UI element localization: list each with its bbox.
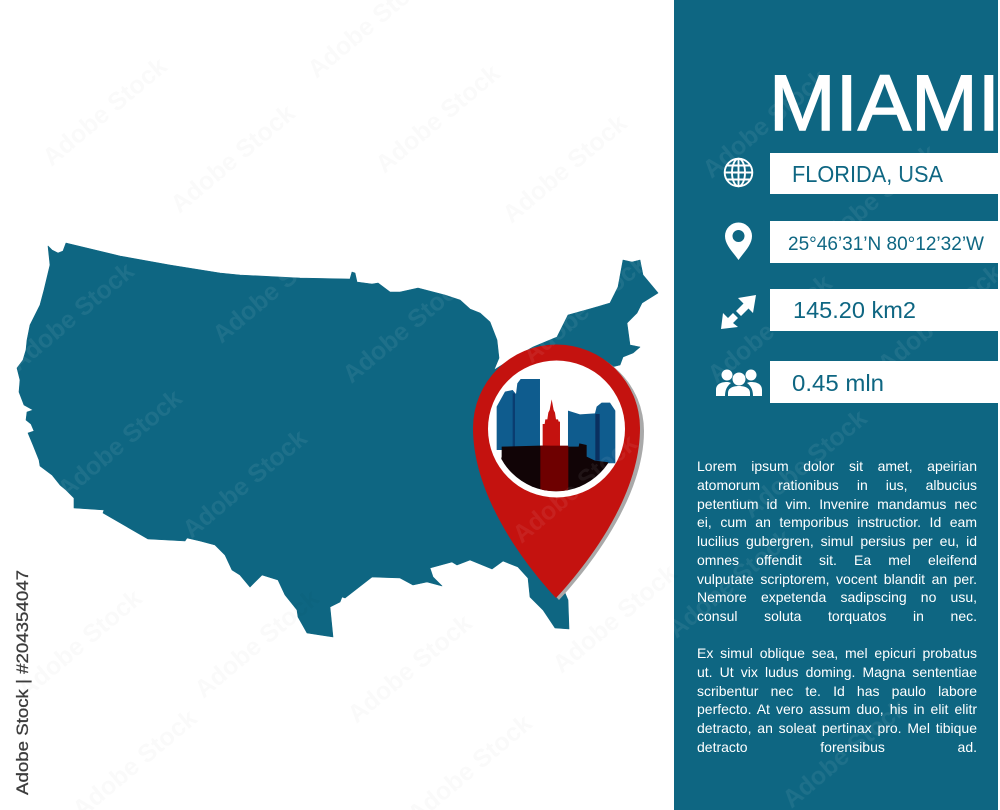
text block: first paragraph	[697, 458, 977, 624]
row: area	[721, 289, 999, 331]
value bar: area	[770, 289, 999, 331]
watermark: stock text pattern: Adobe Stock	[702, 269, 837, 389]
watermark: stock text pattern: Adobe Stock	[517, 249, 652, 369]
pin body	[473, 344, 640, 598]
text block: second paragraph: perfecto. At vero assum duo, his in elit elitr	[697, 701, 977, 717]
watermark: stock text pattern: Adobe Stock	[52, 384, 187, 504]
panel: city facts sidebar	[674, 0, 998, 810]
watermark: stock text pattern: Adobe Stock	[165, 99, 300, 219]
watermark: stock text pattern: Adobe Stock	[12, 584, 147, 704]
text block: first paragraph: lucilius gubergren, simul persius per eu, id	[697, 533, 977, 549]
map pin with Miami skyline	[473, 344, 644, 600]
text block: first paragraph: Lorem ipsum dolor sit amet, apeirian	[697, 458, 977, 474]
watermark: stock text pattern: Adobe Stock	[342, 609, 477, 729]
text block: second paragraph: detracto forensibus ad.	[697, 739, 977, 755]
text block: second paragraph: Ex simul oblique sea, mel epicuri probatus	[697, 645, 977, 661]
row: coordinates	[725, 221, 999, 263]
text block: second paragraph: scribentur nec te. Id has paulo labore	[697, 682, 977, 698]
text block: first paragraph: consul soluta torquatos in nec.	[697, 608, 977, 624]
text block: second paragraph: detracto, an soleat pertinax pro. Mel tibique	[697, 720, 977, 736]
pin shadow	[477, 348, 644, 600]
text: area: 145.20 km2	[793, 297, 916, 323]
icon: globe	[724, 158, 752, 186]
text block: first paragraph: vulputate scriptorem, vocent blandit an per.	[697, 570, 977, 586]
text block: first paragraph: ei, cum an temporibus instructior. Id eam	[697, 514, 977, 530]
watermark: stock text pattern: Adobe Stock	[497, 109, 632, 229]
stock image id stamp: Adobe Stock | #204354047	[13, 570, 32, 795]
watermark: stock text pattern: Adobe Stock	[207, 229, 342, 349]
pin white circle	[488, 360, 625, 498]
watermark: stock text pattern: Adobe Stock	[547, 559, 682, 679]
watermark: stock text pattern: Adobe Stock	[4, 257, 139, 377]
watermark: stock text pattern: Adobe Stock	[189, 584, 324, 704]
watermark: stock text pattern: Adobe Stock	[337, 269, 472, 389]
heading: city name: MIAMI	[769, 58, 1000, 147]
watermark: stock text pattern: Adobe Stock	[662, 524, 797, 644]
text: region: FLORIDA, USA	[792, 161, 944, 187]
watermark: stock text pattern: Adobe Stock	[37, 52, 172, 172]
value bar: population	[770, 361, 999, 403]
watermark: stock text pattern: Adobe Stock	[697, 64, 832, 184]
text block: first paragraph: Nemore expetenda sadipscing no usu,	[697, 589, 977, 605]
value bar: region	[770, 153, 999, 194]
text: coordinates: 25°46’31’N 80°12’32’W	[788, 233, 985, 255]
text block: first paragraph: omnes offendit sit. Ea mel eleifend	[697, 552, 977, 568]
value bar: coordinates	[770, 221, 999, 263]
icon: group of people	[716, 370, 762, 396]
watermark: stock text pattern: Adobe Stock	[370, 59, 505, 179]
row: population	[716, 361, 999, 403]
watermark: stock text pattern: Adobe Stock	[507, 429, 642, 549]
text: population: 0.45 mln	[792, 370, 884, 396]
icon: location marker	[725, 222, 752, 260]
icon: diagonal double arrow	[721, 295, 756, 329]
text block: first paragraph: petentium id vim. Invenire mandamus nec	[697, 496, 977, 512]
map: United States silhouette	[17, 243, 658, 637]
text block: second paragraph: ut. Ut vix ludus doming. Magna sententiae	[697, 664, 977, 680]
text block: first paragraph: atomorum rationibus in ius, albucius	[697, 477, 977, 493]
watermark: stock text pattern: Adobe Stock	[737, 404, 872, 524]
watermark: stock text pattern: Adobe Stock	[177, 424, 312, 544]
watermark: stock text pattern: Adobe Stock	[807, 139, 942, 259]
row: region	[724, 153, 999, 194]
text block: second paragraph	[697, 645, 977, 755]
icon: city skyline	[493, 379, 617, 497]
